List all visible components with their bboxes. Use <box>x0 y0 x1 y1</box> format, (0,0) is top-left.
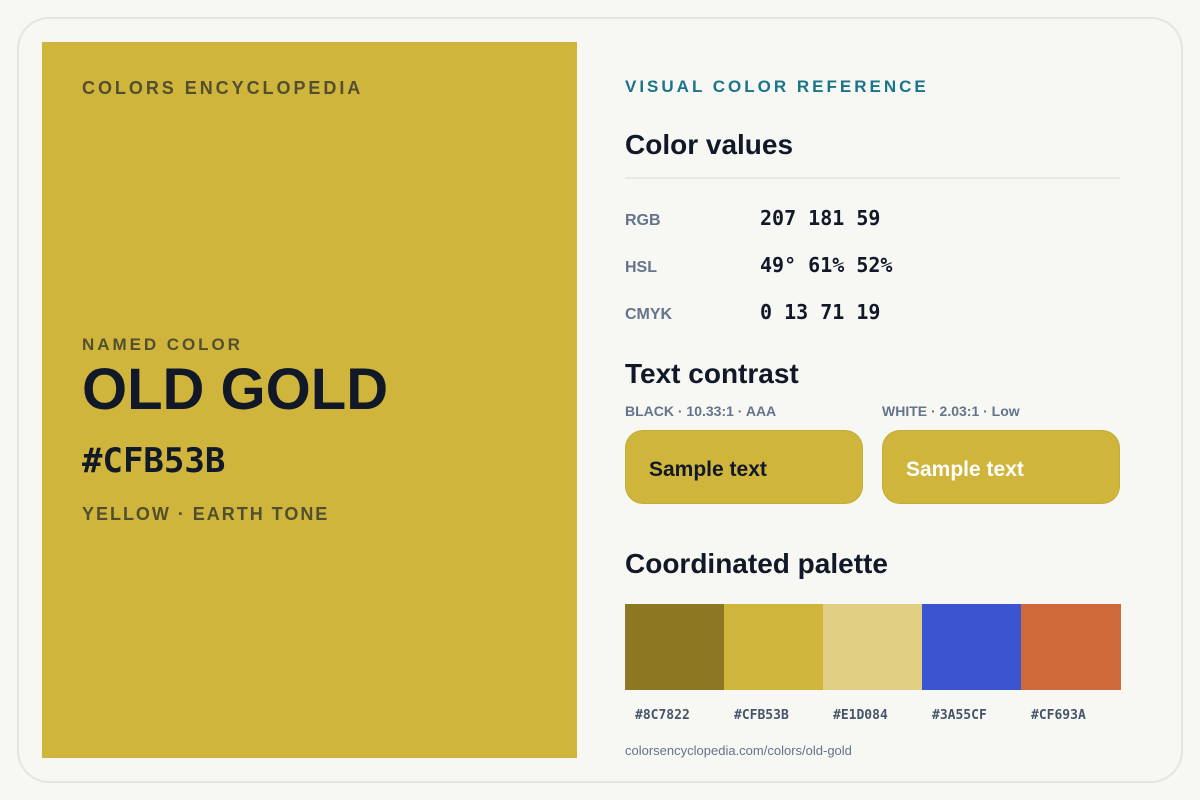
named color label: NAMED COLOR <box>82 335 243 354</box>
panel: color swatch <box>42 42 577 758</box>
divider rule <box>625 177 1120 179</box>
swatch 4 <box>922 604 1021 690</box>
sample: white text: Sample text <box>906 458 1024 481</box>
white contrast label: WHITE · 2.03:1 · Low <box>882 403 1020 419</box>
hex code: #CFB53B <box>82 441 225 481</box>
black contrast label: BLACK · 10.33:1 · AAA <box>625 403 776 419</box>
hex 1: #8C7822 <box>635 708 690 723</box>
color family tags: YELLOW · EARTH TONE <box>82 504 329 524</box>
HSL value: 49° 61% 52% <box>760 253 892 277</box>
swatch 2 <box>724 604 823 690</box>
CMYK label: CMYK <box>625 306 672 323</box>
CMYK value: 0 13 71 19 <box>760 300 880 324</box>
RGB label: RGB <box>625 212 661 229</box>
HSL label: HSL <box>625 259 657 276</box>
hex 3: #E1D084 <box>833 708 888 723</box>
sample: white text <box>882 430 1120 504</box>
section eyebrow: VISUAL COLOR REFERENCE <box>625 77 929 96</box>
swatch 5 <box>1021 604 1121 690</box>
palette strip <box>625 604 1121 690</box>
sample: black text <box>625 430 863 504</box>
swatch 3 <box>823 604 922 690</box>
hex 4: #3A55CF <box>932 708 987 723</box>
heading: text contrast: Text contrast <box>625 358 799 389</box>
swatch 1 <box>625 604 724 690</box>
hex 2: #CFB53B <box>734 708 789 723</box>
row: CMYK <box>625 300 880 324</box>
brand label: COLORS ENCYCLOPEDIA <box>82 78 363 98</box>
color name title: OLD GOLD <box>82 357 388 422</box>
heading: coordinated palette: Coordinated palette <box>625 548 888 579</box>
row: RGB <box>625 206 880 230</box>
heading: color values: Color values <box>625 129 793 160</box>
source URL: colorsencyclopedia.com/colors/old-gold <box>625 743 852 758</box>
RGB value: 207 181 59 <box>760 206 880 230</box>
hex 5: #CF693A <box>1031 708 1086 723</box>
sample: black text: Sample text <box>649 458 767 481</box>
row: HSL <box>625 253 892 277</box>
